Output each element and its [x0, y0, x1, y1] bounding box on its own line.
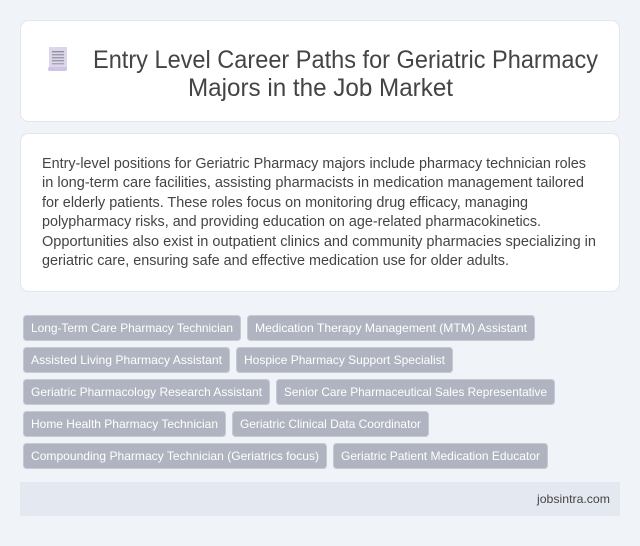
tag: Compounding Pharmacy Technician (Geriatrics focus)	[31, 449, 319, 463]
text block: description: Entry-level positions for Geriatric Pharmacy majors include pharmacy technician roles	[42, 156, 586, 172]
tag	[276, 380, 554, 404]
tag: Geriatric Pharmacology Research Assistant	[31, 385, 263, 399]
panel: header card	[20, 20, 620, 122]
text block: description: in long-term care facilities, assisting pharmacists in medication management tailored	[42, 175, 584, 191]
footer bar	[20, 482, 620, 516]
tag	[248, 316, 534, 340]
tag: Senior Care Pharmaceutical Sales Representative	[284, 385, 547, 399]
tag	[24, 380, 270, 404]
tag: Medication Therapy Management (MTM) Assistant	[255, 321, 528, 335]
tag: Geriatric Clinical Data Coordinator	[240, 417, 421, 431]
tag	[24, 412, 226, 436]
panel: description text card	[20, 134, 620, 292]
title: Majors in the Job Market	[188, 74, 453, 102]
tag	[236, 348, 452, 372]
panel: career tags	[24, 316, 554, 468]
icon: document scroll	[48, 47, 67, 71]
tag: Long-Term Care Pharmacy Technician	[31, 321, 233, 335]
text block: description: for elderly patients. These roles focus on monitoring drug efficacy, managing	[42, 195, 528, 211]
tag: Hospice Pharmacy Support Specialist	[244, 353, 446, 367]
title	[93, 46, 598, 102]
text block: description: Opportunities also exist in outpatient clinics and community pharmacies specializing in	[42, 234, 596, 250]
tag: Home Health Pharmacy Technician	[31, 417, 218, 431]
tag	[24, 348, 230, 372]
tag	[24, 444, 326, 468]
text block: description: polypharmacy risks, and providing education on age-related pharmacokinetics.	[42, 214, 541, 230]
tag	[232, 412, 428, 436]
footer source text: jobsintra.com	[536, 492, 610, 506]
text block: description	[42, 156, 596, 269]
title: Entry Level Career Paths for Geriatric Pharmacy	[93, 46, 598, 74]
text block: description: geriatric care, ensuring safe and effective medication use for older adults.	[42, 253, 509, 269]
tag	[24, 316, 240, 340]
tag: Geriatric Patient Medication Educator	[341, 449, 540, 463]
tag: Assisted Living Pharmacy Assistant	[31, 353, 223, 367]
tag	[334, 444, 548, 468]
